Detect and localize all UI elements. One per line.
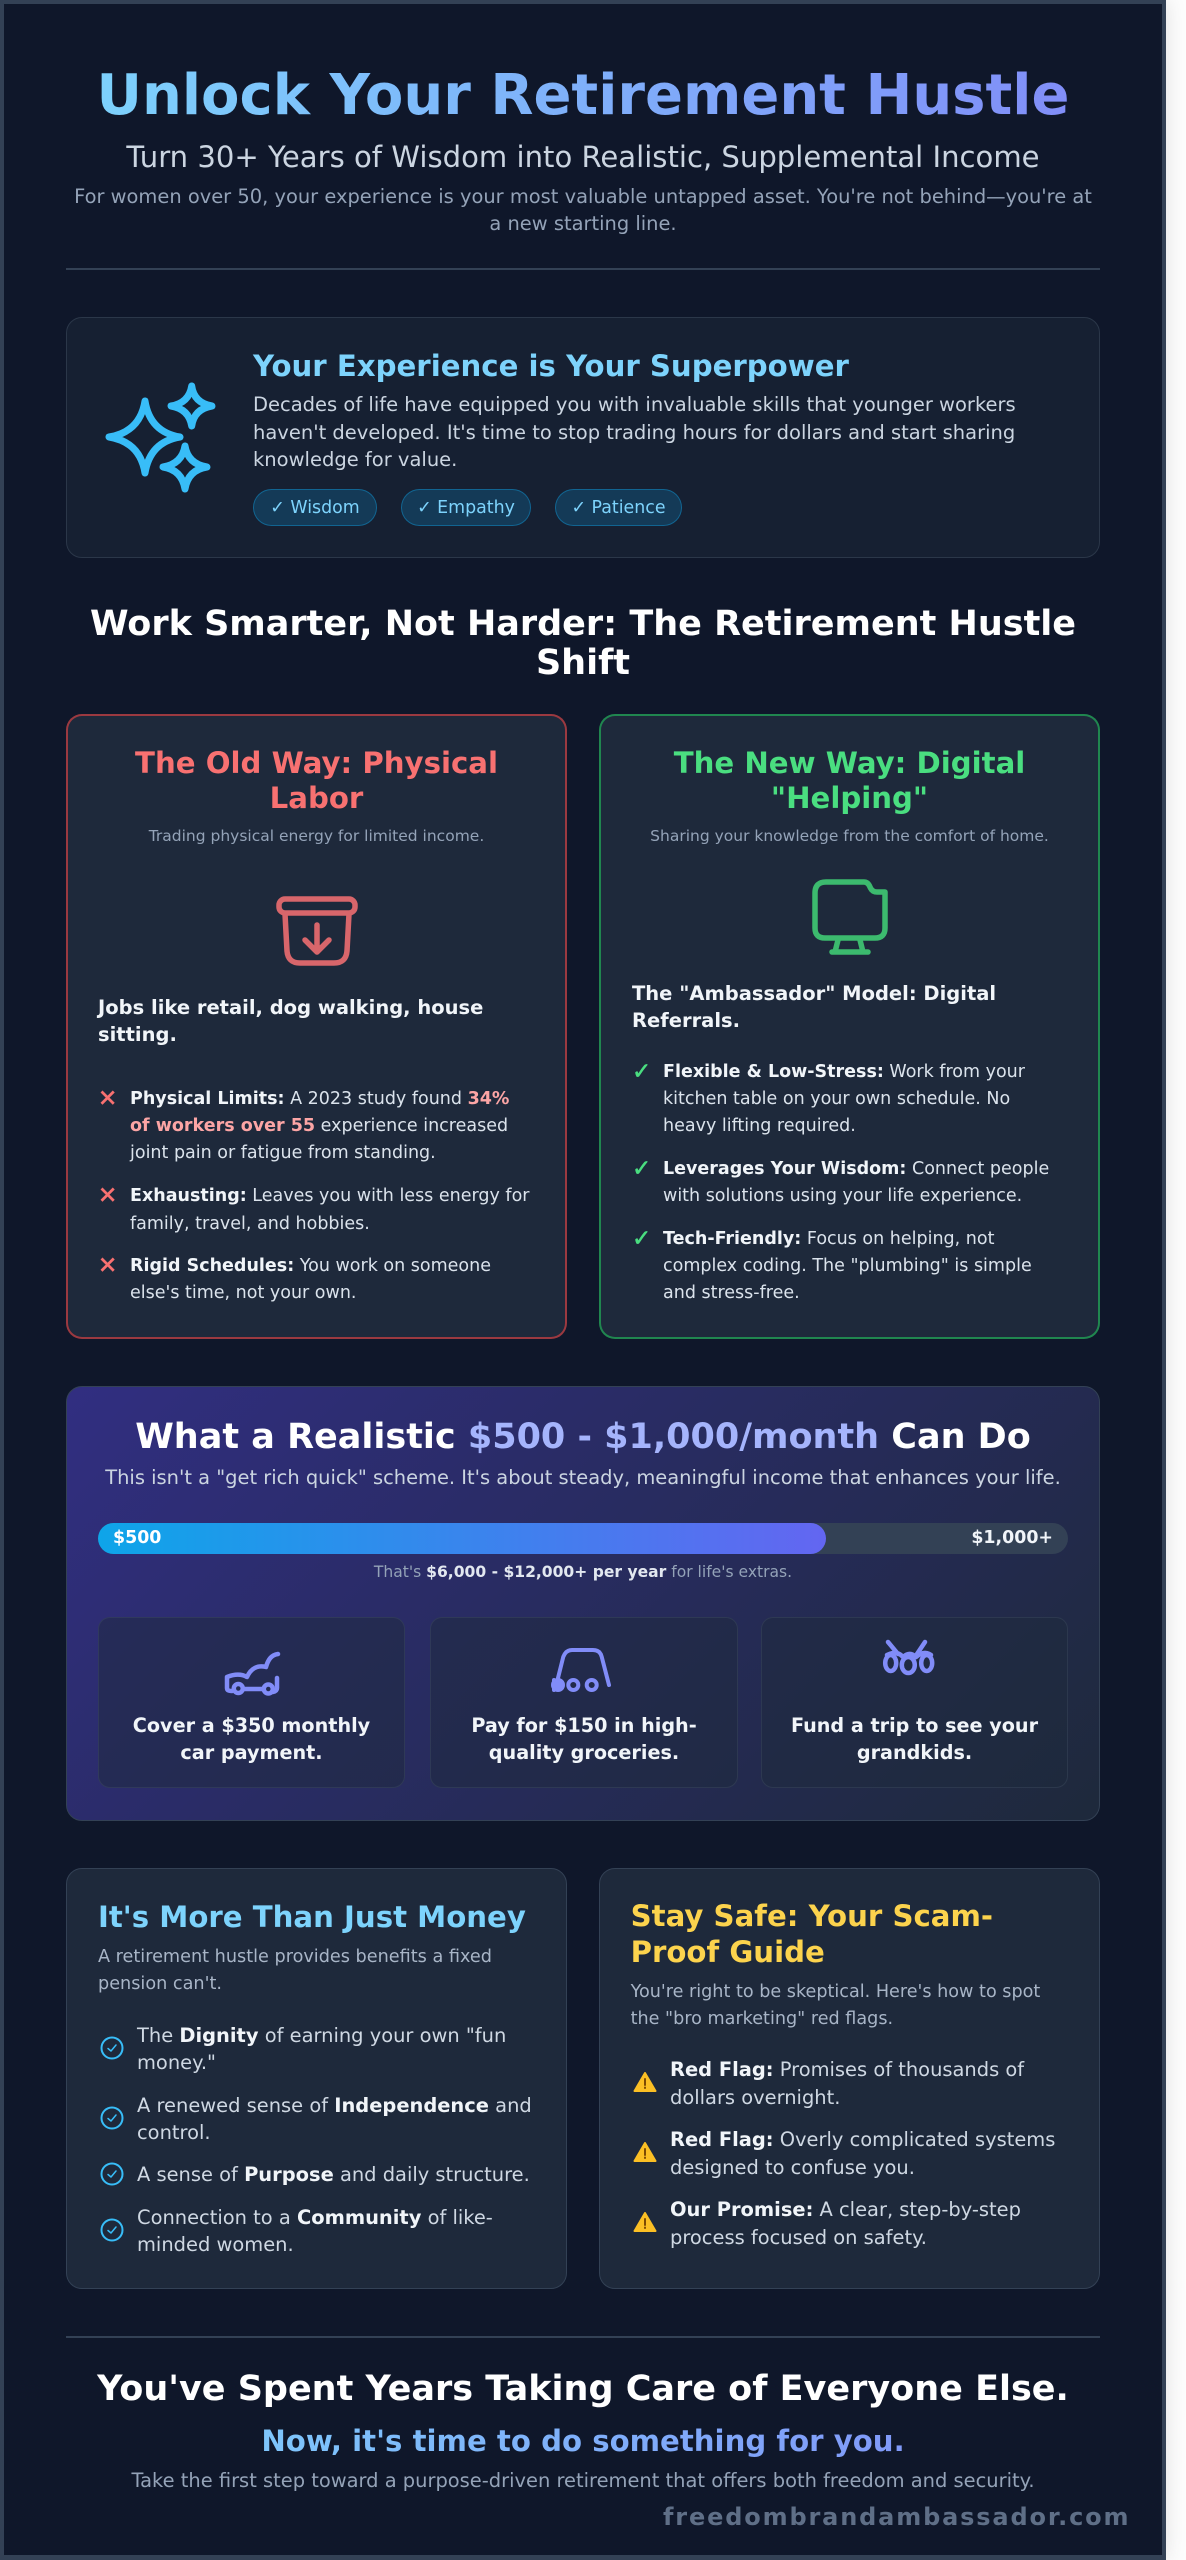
icon: cart xyxy=(551,1648,611,1692)
benefit: flexible: ✓ xyxy=(632,1059,651,1085)
tag: empathy: ✓ Empathy xyxy=(417,498,515,518)
benefit: flexible: Flexible & Low-Stress: Work from your xyxy=(663,1062,1025,1082)
old way summary: Jobs like retail, dog walking, house xyxy=(98,996,483,1019)
old way title: The Old Way: Physical xyxy=(135,746,498,780)
new way subtitle: Sharing your knowledge from the comfort of home. xyxy=(650,826,1049,844)
benefit: community: minded women. xyxy=(137,2233,294,2256)
our promise xyxy=(634,2198,1021,2249)
benefit: wisdom xyxy=(632,1156,1049,1206)
old way summary xyxy=(96,996,483,1046)
our promise: process focused on safety. xyxy=(670,2226,927,2249)
tag: wisdom: ✓ Wisdom xyxy=(270,498,360,518)
drawback: rigid schedules: ✕ xyxy=(98,1253,117,1279)
panel: more than money xyxy=(66,1868,567,2289)
intro text: a new starting line. xyxy=(489,212,677,235)
card: groceries xyxy=(430,1617,738,1788)
drawback: physical limits: ✕ xyxy=(98,1086,117,1112)
card: trip xyxy=(761,1617,1068,1788)
benefit: dignity: money." xyxy=(137,2051,216,2074)
new way summary: Referrals. xyxy=(632,1009,740,1032)
drawback: rigid schedules: else's time, not your own. xyxy=(130,1283,356,1303)
benefit: community: Connection to a Community of like- xyxy=(137,2206,493,2229)
card: car: car payment. xyxy=(180,1740,323,1764)
label: high: $1,000+ xyxy=(971,1528,1053,1548)
intro xyxy=(630,1982,1040,2029)
benefit: dignity: The Dignity of earning your own "fun xyxy=(137,2024,506,2047)
drawback: physical limits: of workers over 55 experience increased xyxy=(130,1116,508,1136)
benefit: wisdom: with solutions using your life experience. xyxy=(663,1186,1022,1206)
old way summary: sitting. xyxy=(98,1023,177,1046)
red flag: overnight: dollars overnight. xyxy=(670,2086,840,2109)
card: trip: grandkids. xyxy=(857,1740,972,1764)
section heading: Work Smarter, Not Harder: The Retirement Hustle xyxy=(90,604,1076,644)
drawback: physical limits: joint pain or fatigue from standing. xyxy=(130,1143,436,1163)
red flag: overnight: Red Flag: Promises of thousands of xyxy=(670,2058,1024,2081)
old way title: Labor xyxy=(270,781,363,815)
panel: scam-proof guide xyxy=(599,1868,1100,2289)
new way title xyxy=(674,746,1025,815)
red flag: complicated xyxy=(634,2128,1055,2179)
title: Unlock Your Retirement Hustle xyxy=(97,63,1069,128)
drawback: physical limits xyxy=(98,1086,509,1163)
benefit: independence: control. xyxy=(137,2121,211,2144)
benefit: flexible: heavy lifting required. xyxy=(663,1116,856,1136)
new way summary xyxy=(632,982,996,1032)
intro: You're right to be skeptical. Here's how to spot xyxy=(631,1982,1040,2002)
old way title xyxy=(135,746,498,815)
body text: haven't developed. It's time to stop trading hours for dollars and start sharing xyxy=(253,421,1015,444)
intro xyxy=(98,1947,492,1994)
drawback: rigid schedules xyxy=(98,1253,491,1303)
panel: old way xyxy=(66,714,567,1339)
intro text xyxy=(74,185,1092,235)
benefit: community xyxy=(100,2206,493,2256)
tag: patience xyxy=(555,489,682,526)
drawback: exhausting: family, travel, and hobbies. xyxy=(130,1214,370,1234)
heading: Proof Guide xyxy=(631,1935,825,1969)
old way subtitle: Trading physical energy for limited income. xyxy=(149,826,484,844)
subtitle: Turn 30+ Years of Wisdom into Realistic, Supplemental Income xyxy=(126,140,1040,174)
drawback: exhausting xyxy=(98,1183,530,1234)
benefit: tech-friendly: and stress-free. xyxy=(663,1283,800,1303)
drawback: physical limits: Physical Limits: A 2023 study found 34% xyxy=(130,1089,509,1109)
benefit: wisdom: Leverages Your Wisdom: Connect people xyxy=(663,1159,1049,1179)
benefit: tech-friendly xyxy=(632,1226,1032,1303)
benefit: flexible xyxy=(632,1059,1025,1136)
label: low: $500 xyxy=(113,1528,161,1548)
icon: archive box xyxy=(276,896,358,966)
body text xyxy=(253,393,1016,471)
heading: Stay Safe: Your Scam- xyxy=(631,1899,993,1933)
benefit: tech-friendly: complex coding. The "plumbing" is simple xyxy=(663,1256,1032,1276)
heading xyxy=(631,1899,993,1969)
our promise: Our Promise: A clear, step-by-step xyxy=(670,2198,1021,2221)
panel: superpower xyxy=(66,317,1100,558)
call to action xyxy=(66,2336,1100,2492)
benefit: tech-friendly: ✓ xyxy=(632,1226,651,1252)
card: groceries: Pay for $150 in high- xyxy=(471,1714,697,1736)
new way title: The New Way: Digital xyxy=(674,746,1025,780)
red flag: overnight xyxy=(634,2058,1024,2109)
drawback: exhausting: ✕ xyxy=(98,1183,117,1209)
heading: Your Experience is Your Superpower xyxy=(253,349,849,383)
body text: Decades of life have equipped you with invaluable skills that younger workers xyxy=(253,393,1016,416)
income heading: What a Realistic $500 - $1,000/month Can Do xyxy=(135,1416,1031,1456)
card: car: Cover a $350 monthly xyxy=(133,1714,370,1736)
tag: empathy xyxy=(401,489,531,526)
heading: It's More Than Just Money xyxy=(98,1900,526,1934)
progress bar xyxy=(98,1523,1068,1554)
icon: sparkles xyxy=(106,382,216,492)
card: trip: Fund a trip to see your xyxy=(791,1714,1038,1736)
bar fill xyxy=(98,1523,826,1554)
section heading: Shift xyxy=(536,643,630,683)
watermark: freedombrandambassador.com xyxy=(663,2503,1130,2531)
benefit: tech-friendly: Tech-Friendly: Focus on helping, not xyxy=(663,1229,994,1249)
header xyxy=(66,63,1100,270)
yearly note: That's $6,000 - $12,000+ per year for life's extras. xyxy=(374,1563,792,1581)
new way title: "Helping" xyxy=(771,781,928,815)
intro: the "bro marketing" red flags. xyxy=(631,2009,893,2029)
intro: pension can't. xyxy=(98,1974,222,1994)
tag: wisdom xyxy=(253,489,377,526)
benefit: independence: A renewed sense of Independence and xyxy=(137,2094,532,2117)
intro text: For women over 50, your experience is your most valuable untapped asset. You're not behind—you're at xyxy=(74,185,1092,208)
income subtitle: This isn't a "get rich quick" scheme. It's about steady, meaningful income that enhances your life. xyxy=(105,1466,1061,1489)
benefit: dignity xyxy=(100,2024,506,2074)
panel: new way xyxy=(599,714,1100,1339)
red flag: complicated: Red Flag: Overly complicated systems xyxy=(670,2128,1055,2151)
drawback: rigid schedules: Rigid Schedules: You work on someone xyxy=(130,1256,491,1276)
drawback: exhausting: Exhausting: Leaves you with less energy for xyxy=(130,1186,529,1206)
closing highlight: Now, it's time to do something for you. xyxy=(261,2424,905,2458)
icon: monitor xyxy=(812,879,888,955)
closing heading: You've Spent Years Taking Care of Everyone Else. xyxy=(97,2369,1069,2409)
body text: knowledge for value. xyxy=(253,448,457,471)
closing text: Take the first step toward a purpose-driven retirement that offers both freedom and security. xyxy=(131,2469,1035,2492)
card: car xyxy=(98,1617,405,1788)
intro: A retirement hustle provides benefits a fixed xyxy=(98,1947,492,1967)
benefit: independence xyxy=(100,2094,532,2144)
benefit: flexible: kitchen table on your own schedule. No xyxy=(663,1089,1010,1109)
tag: patience: ✓ Patience xyxy=(571,498,666,518)
section heading xyxy=(90,604,1076,683)
panel: income xyxy=(66,1386,1100,1821)
new way summary: The "Ambassador" Model: Digital xyxy=(632,982,996,1005)
benefit: purpose: A sense of Purpose and daily structure. xyxy=(137,2163,530,2186)
benefit: wisdom: ✓ xyxy=(632,1156,651,1182)
red flag: complicated: designed to confuse you. xyxy=(670,2156,915,2179)
icon: people xyxy=(882,1640,934,1676)
card: groceries: quality groceries. xyxy=(489,1740,679,1764)
icon: car xyxy=(224,1652,280,1696)
